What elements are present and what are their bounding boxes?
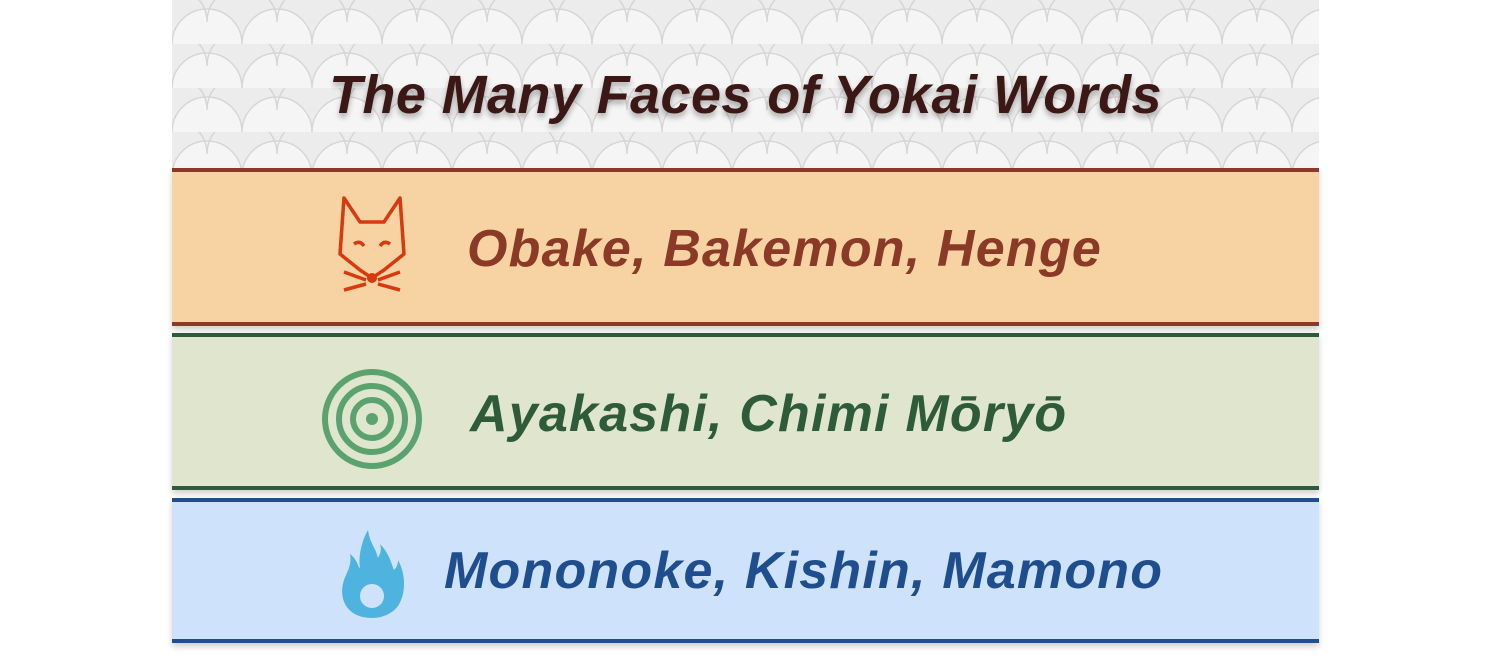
text: obake: Obake, Bakemon, Henge bbox=[467, 220, 1102, 278]
band: mononoke bbox=[172, 498, 1319, 643]
title: The Many Faces of Yokai Words bbox=[329, 65, 1162, 125]
header panel with scale pattern bbox=[172, 0, 1319, 168]
text: ayakashi: Ayakashi, Chimi Mōryō bbox=[470, 385, 1067, 443]
text: mononoke: Mononoke, Kishin, Mamono bbox=[444, 542, 1163, 600]
band: obake bbox=[172, 168, 1319, 326]
icon: fox bbox=[338, 196, 406, 292]
band: ayakashi bbox=[172, 333, 1319, 490]
icon: concentric circles bbox=[322, 369, 422, 469]
icon: flame bbox=[342, 530, 404, 618]
